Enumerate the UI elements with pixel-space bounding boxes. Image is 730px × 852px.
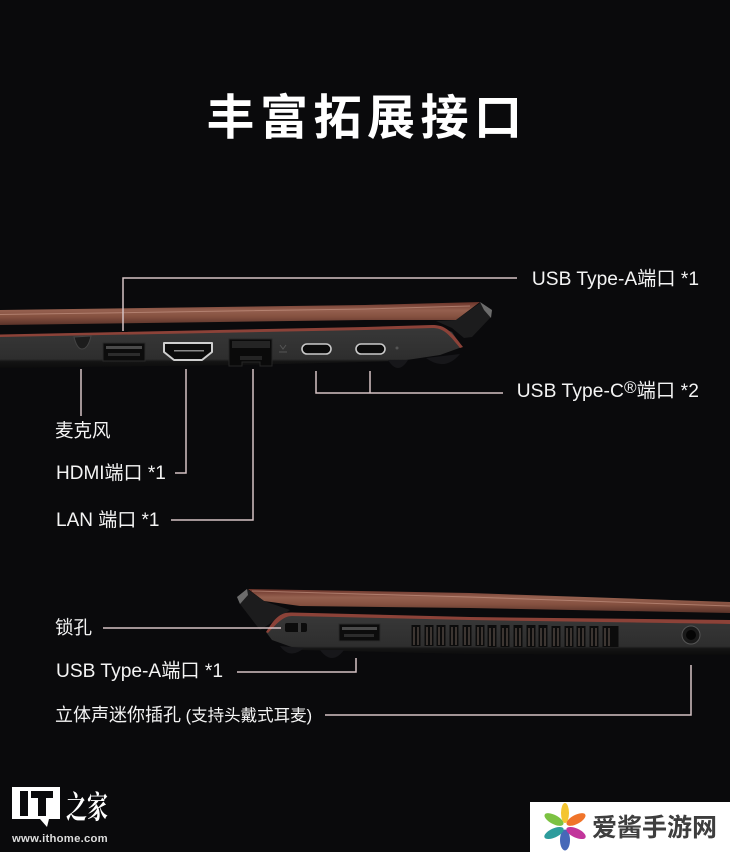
- icon: LAN port: [229, 339, 272, 366]
- red trim: [0, 325, 463, 348]
- label: USB Type-C: USB Type-C: [517, 381, 624, 402]
- hinge: [436, 303, 492, 338]
- icon: USB-A port: [339, 624, 380, 641]
- LAN pins: [232, 341, 270, 360]
- body: [266, 615, 730, 655]
- icon: status LED: [396, 346, 398, 350]
- laptop: right side view: [237, 589, 730, 658]
- hinge: [237, 589, 290, 630]
- logo: IT home: 之家: [66, 782, 108, 827]
- body: [0, 327, 462, 368]
- feet: [280, 646, 344, 658]
- icon: audio jack: [682, 626, 700, 644]
- label: LAN: LAN 端口 *1: [56, 509, 159, 531]
- icon: USB-C port 2: [356, 344, 385, 354]
- logo: IT home: www.ithome.com: [11, 833, 108, 845]
- icon: USB-A port: [103, 343, 145, 361]
- icon: colored flower: [543, 803, 587, 850]
- icon: microphone: [74, 336, 91, 349]
- vents: [414, 625, 614, 647]
- label: lock: 锁孔: [55, 617, 92, 638]
- label: HDMI: HDMI端口 *1: [56, 462, 166, 484]
- lid highlight: [0, 306, 470, 314]
- laptop: left side view: [0, 302, 492, 368]
- label: microphone: 麦克风: [55, 420, 111, 441]
- logo: IT home: [11, 782, 108, 845]
- icon: HDMI port: [164, 343, 212, 360]
- label: audio jack: 立体声迷你插孔 (支持头戴式耳麦): [55, 705, 312, 725]
- watermark: game site badge: [530, 802, 730, 852]
- label: USB Type-A top: USB Type-A端口 *1: [532, 268, 699, 290]
- lid: [0, 302, 480, 325]
- icon: USB-C port 1: [302, 344, 331, 354]
- icon: network glyph: [279, 345, 287, 352]
- icon: lock slot: [285, 623, 307, 632]
- callout lines: [81, 278, 691, 715]
- feet: [388, 354, 460, 368]
- title: 丰富拓展接口: [206, 92, 528, 145]
- label: USB Type-C: 端口 *2: [637, 380, 699, 402]
- red trim: [266, 612, 730, 633]
- label: USB Type-A bottom: USB Type-A端口 *1: [56, 660, 223, 682]
- lid highlight: [252, 591, 730, 606]
- site name: 爱酱手游网: [592, 814, 717, 842]
- lid: [248, 589, 730, 613]
- label: USB Type-C: ®: [624, 378, 637, 397]
